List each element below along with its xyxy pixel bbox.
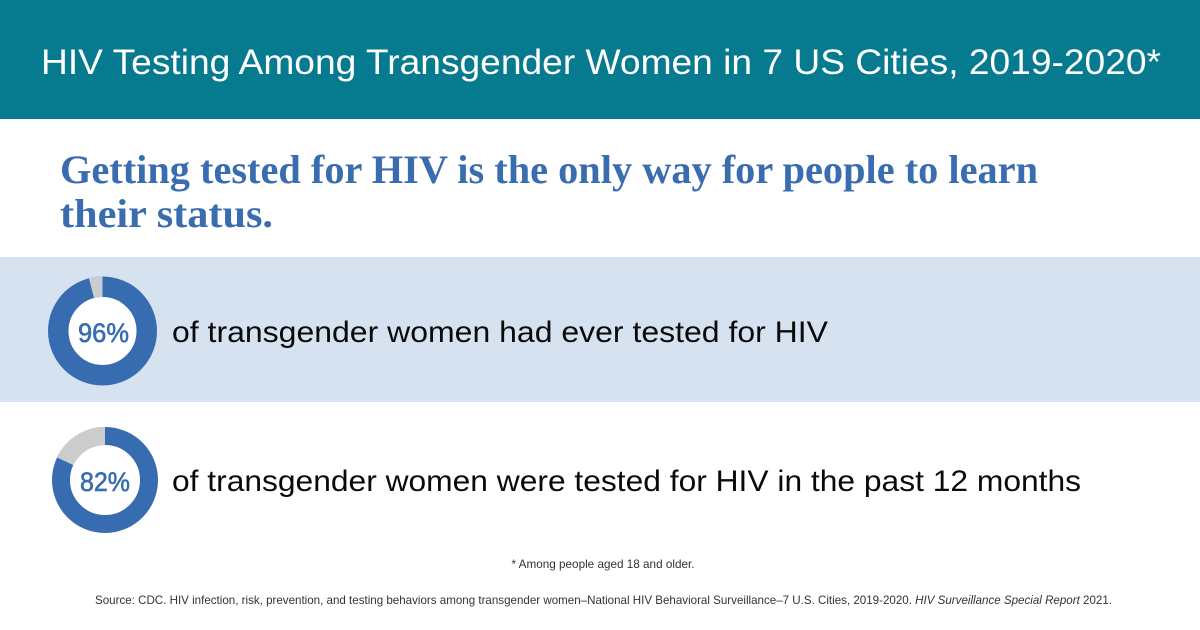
donut chart: 96% [58,287,147,375]
headline: Getting tested for HIV is the only way for people to learn [60,147,1038,192]
value: 96%: 96% [78,318,129,348]
statement: ever tested: of transgender women had ever tested for HIV [172,316,828,349]
value: 82%: 82% [80,467,130,497]
statement: past 12 months: of transgender women were tested for HIV in the past 12 months [172,465,1081,498]
header banner [0,0,1200,119]
panel: tested past 12 months [61,436,1081,524]
donut chart: 82% [61,436,149,524]
title: HIV Testing Among Transgender Women in 7 US Cities, 2019-2020* [41,43,1161,82]
headline: their status. [60,191,273,236]
source citation: Source: CDC. HIV infection, risk, prevention, and testing behaviors among transgender women–National HIV Behavioral Surveillance–7 U.S. Cities, 2019-2020. HIV Surveillance Special Report 2021. [95,593,1112,607]
panel: ever tested [0,257,1200,402]
headline [60,147,1038,236]
footnote: * Among people aged 18 and older. [512,557,694,571]
